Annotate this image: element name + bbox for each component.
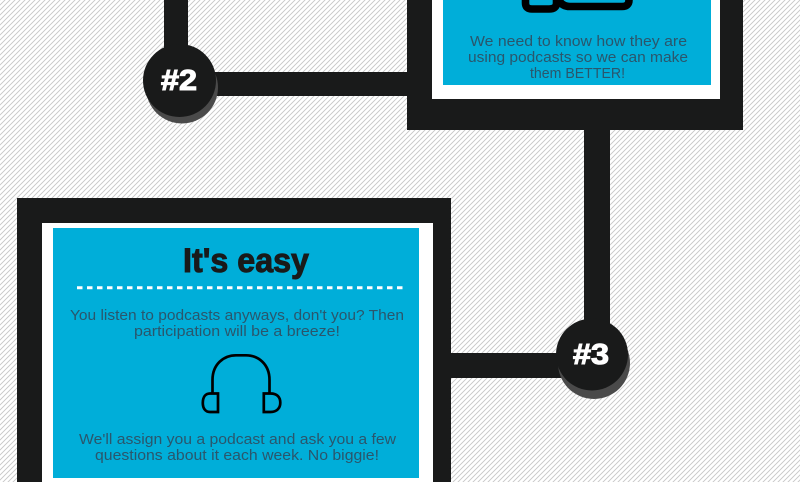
divider: dashed rule [77,286,403,289]
text: top card description: using podcasts so we can make [468,49,688,66]
connector: step 3 to bottom panel [449,353,574,378]
text: details [79,431,396,464]
panel: top card [407,0,743,130]
text: intro: You listen to podcasts anyways, don't you? Then [70,307,404,324]
text: top card description: them BETTER! [530,65,625,82]
connector: step 2 to top panel [200,72,410,96]
text: details: We'll assign you a podcast and ask you a few [79,431,396,448]
text: details: questions about it each week. No biggie! [95,447,379,464]
badge: step 3 [556,318,630,399]
text: top card description [468,33,688,82]
icon: device outline [526,0,629,9]
badge: step 3: #3 [573,339,609,371]
panel: It's easy card [17,198,451,482]
connector: step 2 vertical line [164,0,188,60]
icon: headphones [203,355,280,412]
text: intro [70,307,404,340]
connector: top panel to step 3 [584,128,610,333]
text: intro: participation will be a breeze! [134,323,340,340]
badge: step 2: #2 [161,65,197,97]
text: top card description: We need to know how they are [470,33,687,50]
badge: step 2 [143,44,218,124]
heading: It's easy: It's easy [183,242,309,280]
